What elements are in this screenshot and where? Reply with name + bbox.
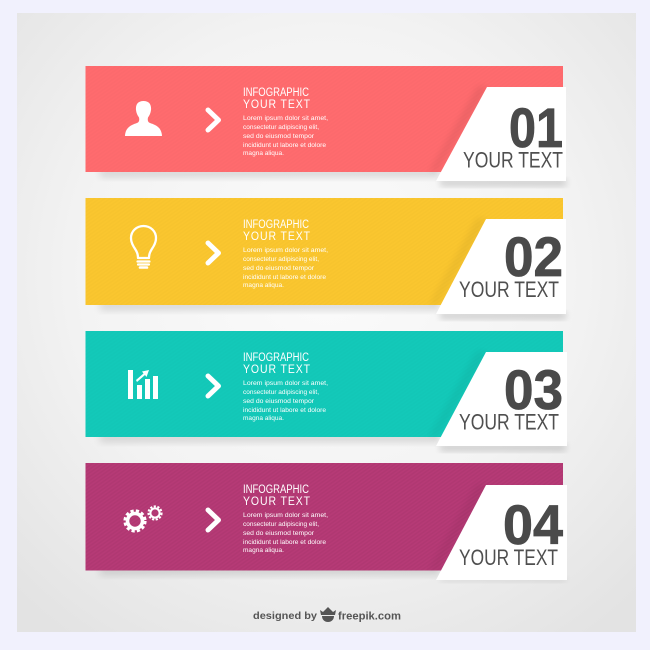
text block: description: magna aliqua. <box>243 547 284 554</box>
panel: band 4 (magenta) <box>86 463 567 582</box>
number tab: YOUR TEXT <box>459 545 558 570</box>
text block: description: incididunt ut labore et dolore <box>243 142 326 149</box>
number tab <box>430 87 566 186</box>
text block: description: magna aliqua. <box>243 150 284 157</box>
text block: description <box>243 484 328 554</box>
number tab: YOUR TEXT <box>463 148 563 172</box>
arrow: chevron <box>208 243 218 263</box>
text block: description: consectetur adipiscing elit, <box>243 521 319 528</box>
text block: description: YOUR TEXT <box>243 231 311 243</box>
icon: bar chart with arrow <box>128 370 158 399</box>
text block: description: incididunt ut labore et dolore <box>243 539 326 546</box>
text block: description: consectetur adipiscing elit, <box>243 124 319 131</box>
icon: person <box>125 101 162 136</box>
text block: description: incididunt ut labore et dolore <box>243 407 326 414</box>
text block: description: consectetur adipiscing elit, <box>243 256 319 263</box>
credit: designed by freepik <box>253 607 401 622</box>
text block: description: sed do eiusmod tempor <box>243 530 315 537</box>
text block: description: magna aliqua. <box>243 282 284 289</box>
text block: description: INFOGRAPHIC <box>243 219 309 231</box>
text block: description: Lorem ipsum dolor sit amet, <box>243 512 328 519</box>
text block: description: magna aliqua. <box>243 415 284 422</box>
text block: description: sed do eiusmod tempor <box>243 133 315 140</box>
text block: description <box>243 219 328 289</box>
arrow: chevron <box>208 110 218 130</box>
text block: description <box>243 352 328 422</box>
panel: band 2 (yellow) <box>86 198 566 319</box>
text block: description: Lorem ipsum dolor sit amet, <box>243 115 328 122</box>
text block: description: incididunt ut labore et dolore <box>243 274 326 281</box>
number tab: YOUR TEXT <box>459 410 559 434</box>
arrow: chevron <box>208 510 218 530</box>
text block: description: Lorem ipsum dolor sit amet, <box>243 247 328 254</box>
text block: description <box>243 87 328 157</box>
number tab <box>430 352 567 451</box>
credit: designed by freepik: freepik.com <box>338 610 401 622</box>
panel: band 3 (teal) <box>86 331 567 451</box>
text block: description: sed do eiusmod tempor <box>243 265 315 272</box>
credit: designed by freepik: designed by <box>253 610 317 622</box>
text block: description: YOUR TEXT <box>243 496 311 508</box>
text block: description: YOUR TEXT <box>243 99 311 111</box>
text block: description: sed do eiusmod tempor <box>243 398 315 405</box>
number tab: 02 <box>504 225 563 288</box>
text block: description: YOUR TEXT <box>243 364 311 376</box>
text block: description: INFOGRAPHIC <box>243 352 309 364</box>
number tab: 04 <box>503 493 563 556</box>
icon: light bulb <box>131 226 156 268</box>
icon: gears <box>125 506 162 531</box>
number tab: YOUR TEXT <box>459 277 559 302</box>
number tab: 03 <box>504 358 563 421</box>
number tab <box>430 219 566 319</box>
text block: description: consectetur adipiscing elit, <box>243 389 319 396</box>
text block: description: Lorem ipsum dolor sit amet, <box>243 380 328 387</box>
arrow: chevron <box>208 376 218 396</box>
text block: description: INFOGRAPHIC <box>243 484 309 496</box>
icon: freepik logo <box>320 607 336 622</box>
panel: band 1 (coral) <box>86 66 566 186</box>
number tab: 01 <box>509 96 563 159</box>
text block: description: INFOGRAPHIC <box>243 87 309 99</box>
number tab <box>430 485 567 582</box>
